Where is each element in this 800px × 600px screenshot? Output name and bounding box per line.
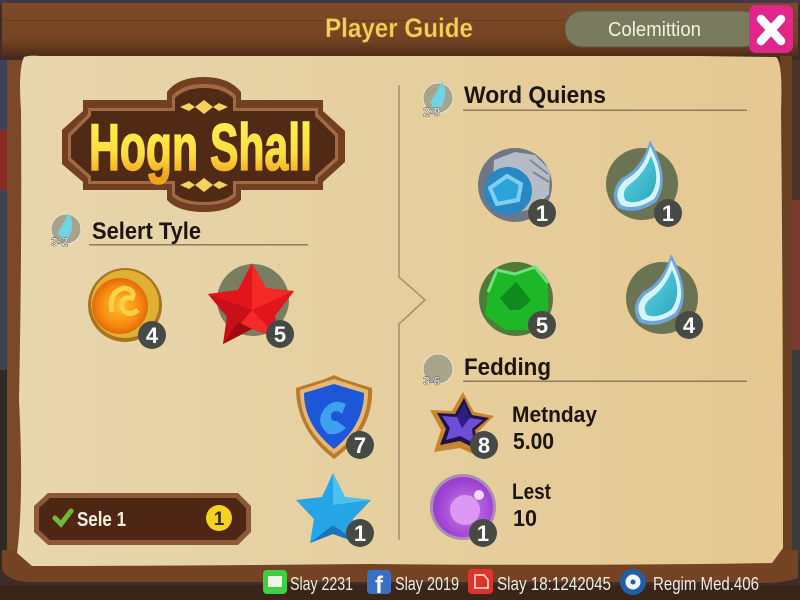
stat: Regim Med.406: Regim Med.406 (653, 574, 759, 594)
stat: Slay 2231: Slay 2231 (290, 574, 353, 594)
heading: Fedding (423, 354, 747, 388)
icon: purple star, count 8 (430, 392, 498, 459)
icon: section leaf (51, 213, 81, 249)
icon: ice drop, count 4 (626, 254, 703, 339)
icon: ice drop, count 1: 1 (662, 201, 674, 226)
text: Metnday value: Metnday (512, 402, 598, 427)
sign title text: Hogn Shall (89, 110, 312, 184)
icon: section badge (423, 354, 453, 388)
competition pill (565, 11, 760, 47)
text: Metnday value: 5.00 (513, 428, 554, 454)
footer stats bar (263, 569, 759, 599)
icon: section leaf: 3-2 (51, 235, 69, 249)
stat: Slay 2019: f (375, 572, 384, 599)
icon: section leaf: 2-9 (423, 105, 441, 119)
stat: Slay 18:1242045: Slay 18:1242045 (497, 574, 611, 594)
icon: close button (749, 5, 793, 53)
divider chevron (399, 85, 425, 540)
icon: blue shield, count 7: 7 (354, 433, 366, 458)
icon: section badge: 3-6 (423, 374, 441, 388)
icon: ice drop, count 4: 4 (683, 313, 696, 338)
stat: Slay 2019: Slay 2019 (395, 574, 459, 594)
icon: purple star, count 8: 8 (478, 433, 490, 458)
stat: Regim Med.406 (620, 569, 759, 595)
icon: green gem, count 5: 5 (536, 313, 548, 338)
icon: purple orb, count 1 (430, 474, 497, 547)
icon: silver gem, count 1 (478, 148, 556, 227)
text: Lest value: 10 (513, 505, 537, 531)
icon: silver gem, count 1: 1 (536, 201, 548, 226)
icon: purple orb, count 1: 1 (477, 521, 489, 546)
signboard: Hogn Shall (62, 77, 345, 212)
text: Lest value: Lest (512, 479, 552, 504)
heading: Fedding: Fedding (464, 354, 551, 381)
icon: yellow coin (206, 505, 232, 531)
icon: blue star, count 1: 1 (354, 521, 366, 546)
button: Sele 1: Sele 1 (77, 509, 126, 531)
icon: green gem, count 5 (479, 262, 556, 339)
icon: green check (55, 511, 71, 524)
icon: fire coin, count 4 (88, 268, 166, 349)
stat: Slay 2231 (263, 570, 353, 594)
icon: fire coin, count 4: 4 (146, 323, 159, 348)
button: Sele 1 (34, 493, 251, 545)
stat: Slay 2019 (367, 570, 459, 599)
icon: bottom ornament (180, 178, 228, 192)
icon: blue star, count 1 (296, 473, 374, 547)
text: Lest value (512, 479, 552, 531)
icon: blue shield, count 7 (296, 375, 374, 459)
title: Player Guide: Player Guide (325, 13, 473, 43)
heading: Selert Tyle: Selert Tyle (92, 218, 201, 245)
competition pill: Colemittion (608, 19, 701, 41)
icon: red star, count 5: 5 (274, 322, 286, 347)
text: Metnday value (512, 402, 598, 454)
heading: Word Quiens (423, 81, 747, 119)
heading: Word Quiens: Word Quiens (464, 82, 606, 109)
icon: section leaf (423, 81, 453, 119)
icon: ice drop, count 1 (606, 140, 682, 227)
icon: yellow coin: 1 (214, 509, 225, 530)
stat: Slay 18:1242045 (468, 569, 611, 594)
icon: top ornament (180, 100, 228, 114)
icon: red star, count 5 (208, 263, 294, 348)
heading: Selert Tyle (51, 213, 308, 249)
